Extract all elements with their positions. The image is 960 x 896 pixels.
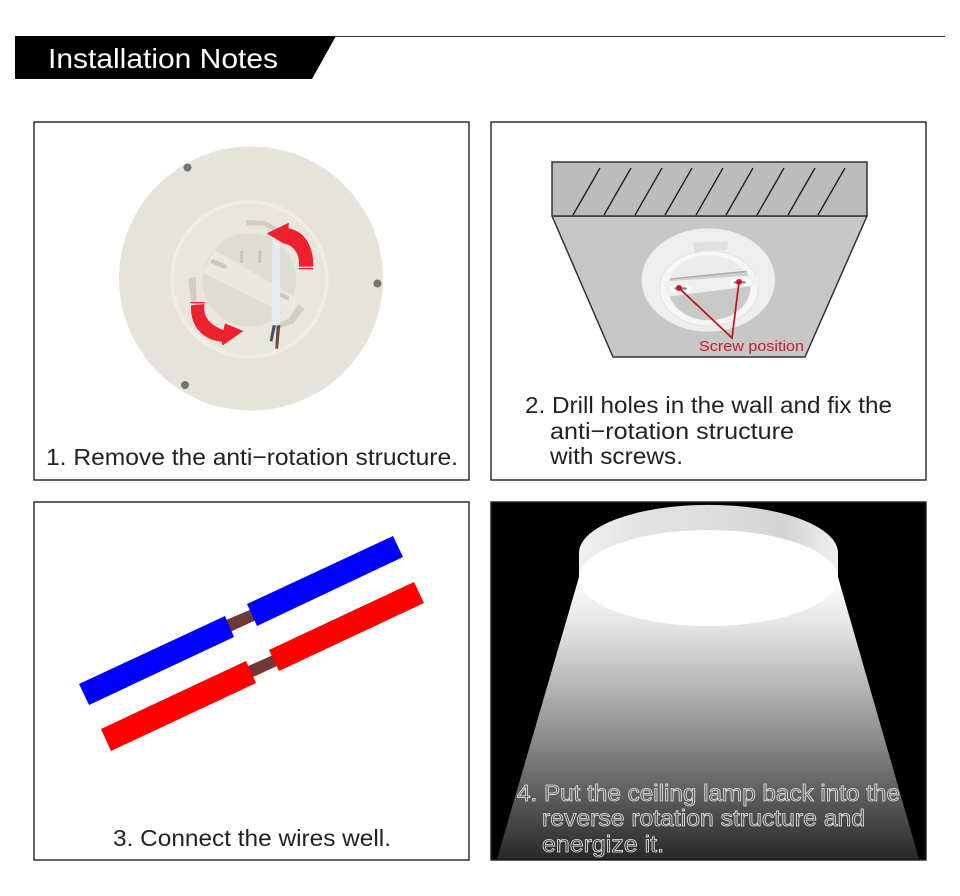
step 4 caption (517, 780, 900, 857)
wire (270, 240, 280, 349)
arrow: upper rotate (267, 223, 313, 269)
arrow: lower rotate (190, 302, 243, 346)
callout: screw position: Screw position (699, 338, 804, 355)
illustration: light beam (497, 577, 919, 859)
step 2 caption: 2. Drill holes in the wall and fix the (525, 392, 892, 418)
step 2 caption: anti−rotation structure (550, 418, 794, 444)
panel: step 3 connect wires (34, 502, 469, 860)
step 1 caption: 1. Remove the anti−rotation structure. (46, 444, 458, 470)
step 4 caption: energize it. (542, 831, 664, 857)
illustration: blue wire (79, 536, 403, 705)
panel: step 2 drill holes (491, 122, 926, 480)
step 2 caption (525, 392, 892, 469)
panel: step 1 remove anti-rotation structure (34, 122, 469, 480)
step 4 caption: reverse rotation structure and (542, 805, 865, 831)
step 2 caption: with screws. (549, 443, 683, 469)
step 4 caption: 4. Put the ceiling lamp back into the (517, 780, 900, 806)
illustration: red wire (101, 582, 424, 751)
illustration: ceiling lamp (579, 505, 838, 626)
panel: step 4 lamp on (491, 502, 926, 860)
step 3 caption: 3. Connect the wires well. (113, 825, 391, 851)
header: Installation Notes: Installation Notes (48, 43, 278, 74)
callout: screw position (676, 279, 804, 355)
illustration: ceiling and mount (552, 162, 867, 357)
header: Installation Notes (15, 36, 945, 79)
icon: lamp back plate (119, 146, 383, 410)
